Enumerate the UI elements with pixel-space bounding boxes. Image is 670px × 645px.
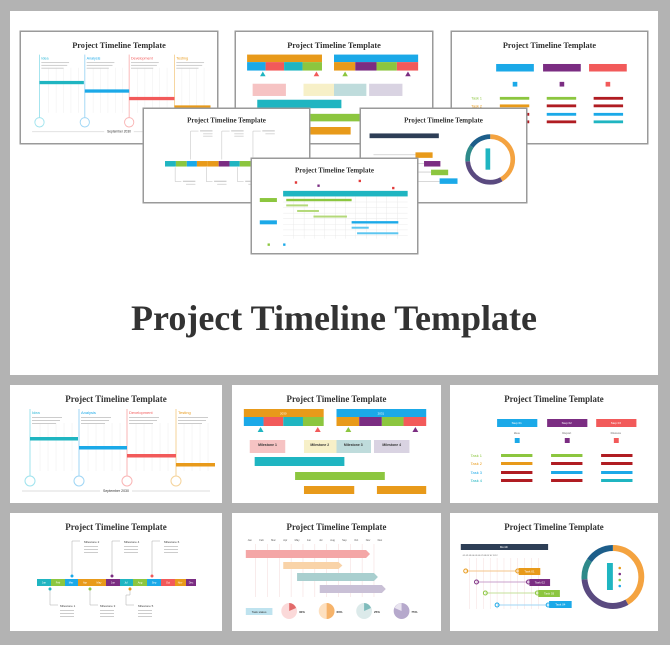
slide 4: month milestones: Jun [111, 580, 116, 584]
slide 4: month milestones: Project Timeline Template [65, 522, 167, 532]
slide 6: donut task chart: Task 04 [555, 602, 566, 607]
slide 1: phase timeline: Project Timeline Template [65, 394, 167, 404]
slide 3: steps: Project Timeline Template [504, 394, 604, 404]
slide 4: month milestones: Jul [124, 580, 128, 584]
slide 3: steps: Step 03 [611, 421, 621, 425]
slide D: month milestones (hero): Project Timeline Template [187, 116, 266, 124]
slide 2: quarters: Milestone 4 [382, 443, 401, 447]
slide F: gantt table (hero): Project Timeline Template [295, 166, 374, 175]
slide 1: phase timeline [10, 385, 222, 503]
slide 3: steps: Step 02 [562, 421, 572, 425]
slide 5: arrow gantt with pies: Jan [248, 538, 252, 542]
slide C: steps (hero) [452, 32, 647, 143]
slide 5: arrow gantt with pies: Task status [252, 610, 267, 614]
slide 3: steps: Report [562, 431, 571, 435]
slide C: steps (hero): Task 3 [471, 113, 482, 117]
slide 2: quarters [232, 385, 441, 503]
slide 1: phase timeline: Testing [178, 410, 191, 415]
slide 5: arrow gantt with pies: Jun [307, 538, 312, 542]
slide A: phase timeline (hero): Idea [41, 56, 49, 60]
slide 2: quarters: Milestone 2 [310, 443, 329, 447]
slide 5: arrow gantt with pies: Feb [259, 538, 264, 542]
slide 3: steps [450, 385, 658, 503]
panel: hero [10, 11, 658, 375]
slide A: phase timeline (hero): September 2030 [107, 130, 131, 134]
slide 3: steps: Task 4 [471, 478, 483, 483]
slide 6: donut task chart: Task 03 [544, 591, 555, 596]
slide 4: month milestones: Milestone 3 [100, 604, 116, 608]
slide B: quarters (hero) [236, 32, 432, 143]
slide F: gantt table (hero) [252, 159, 417, 253]
slide C: steps (hero): Task 1 [471, 97, 482, 101]
slide 4: month milestones: Milestone 6 [164, 540, 180, 544]
slide D: month milestones (hero) [144, 109, 309, 202]
slide 3: steps: Idea [514, 431, 520, 435]
slide 4: month milestones [10, 513, 222, 631]
slide B: quarters (hero): Project Timeline Template [287, 41, 381, 50]
slide 2: quarters: 2031 [378, 411, 384, 416]
slide 4: month milestones: Dec [189, 580, 194, 584]
slide 1: phase timeline: Idea [32, 410, 41, 415]
slide A: phase timeline (hero): Development [131, 56, 153, 60]
slide 6: donut task chart: Task 02 [535, 580, 545, 585]
slide 5: arrow gantt with pies: 30% [299, 610, 305, 614]
slide 3: steps: Discuss [611, 431, 621, 435]
slide 5: arrow gantt with pies: Oct [354, 538, 358, 542]
slide 6: donut task chart: 01 02 03 04 05 06 07 08 09 10 11 12 [463, 555, 498, 557]
slide 3: steps: Task 2 [471, 461, 482, 466]
slide 5: arrow gantt with pies: Aug [330, 538, 335, 542]
slide E: donut (hero) [361, 109, 526, 202]
slide E: donut (hero): Project Timeline Template [404, 116, 483, 124]
slide 1: phase timeline: Analysis [81, 410, 96, 415]
slide C: steps (hero): Project Timeline Template [503, 41, 596, 50]
slide 4: month milestones: Milestone 5 [138, 604, 154, 608]
slide A: phase timeline (hero) [21, 32, 217, 143]
slide A: phase timeline (hero): Analysis [87, 56, 101, 60]
slide 5: arrow gantt with pies: 25% [374, 610, 380, 614]
slide 4: month milestones: May [97, 580, 102, 584]
slide 4: month milestones: Apr [83, 580, 87, 584]
slide 6: donut task chart: Month [500, 545, 508, 549]
slide 6: donut task chart: Project Timeline Template [504, 522, 604, 532]
slide 3: steps: Task 1 [471, 453, 482, 458]
slide 5: arrow gantt with pies [232, 513, 441, 631]
slide 6: donut task chart: Task 01 [524, 569, 535, 574]
slide 2: quarters: Milestone 1 [258, 443, 277, 447]
slide 5: arrow gantt with pies: Project Timeline Template [287, 522, 386, 532]
slide 5: arrow gantt with pies: Nov [366, 538, 371, 542]
slide 4: month milestones: Nov [178, 580, 183, 584]
hero title: Project Timeline Template [131, 298, 537, 338]
slide 3: steps: Task 3 [471, 470, 483, 475]
slide A: phase timeline (hero): Testing [176, 56, 188, 60]
slide 4: month milestones: Aug [138, 580, 143, 584]
slide C: steps (hero): Task 2 [471, 104, 482, 108]
slide 3: steps: Step 01 [512, 421, 522, 425]
slide C: steps (hero): Task 4 [471, 120, 482, 124]
slide 4: month milestones: Mar [69, 580, 73, 584]
slide 1: phase timeline: Development [129, 410, 153, 415]
slide 2: quarters: Milestone 3 [344, 443, 363, 447]
slide 4: month milestones: Milestone 4 [124, 540, 140, 544]
slide 5: arrow gantt with pies: 75% [411, 610, 418, 614]
slide 2: quarters: 2030 [280, 411, 287, 416]
slide 4: month milestones: Feb [56, 580, 61, 584]
slide 5: arrow gantt with pies: May [295, 538, 300, 542]
slide 4: month milestones: Oct [166, 580, 170, 584]
slide 6: donut task chart [450, 513, 658, 631]
slide 4: month milestones: Milestone 2 [84, 540, 100, 544]
slide 4: month milestones: Milestone 1 [60, 604, 76, 608]
slide 4: month milestones: Jan [42, 580, 47, 584]
slide 5: arrow gantt with pies: Mar [271, 538, 276, 542]
slide 5: arrow gantt with pies: Jul [319, 538, 323, 542]
slide 5: arrow gantt with pies: Apr [283, 538, 287, 542]
slide 1: phase timeline: September 2030 [103, 489, 129, 493]
slide 2: quarters: Project Timeline Template [287, 394, 386, 404]
slide A: phase timeline (hero): Project Timeline Template [72, 41, 166, 50]
slide 5: arrow gantt with pies: Dec [378, 538, 383, 542]
slide 5: arrow gantt with pies: Sep [342, 538, 347, 542]
slide 4: month milestones: Sep [152, 580, 157, 584]
slide 5: arrow gantt with pies: 60% [336, 610, 343, 614]
